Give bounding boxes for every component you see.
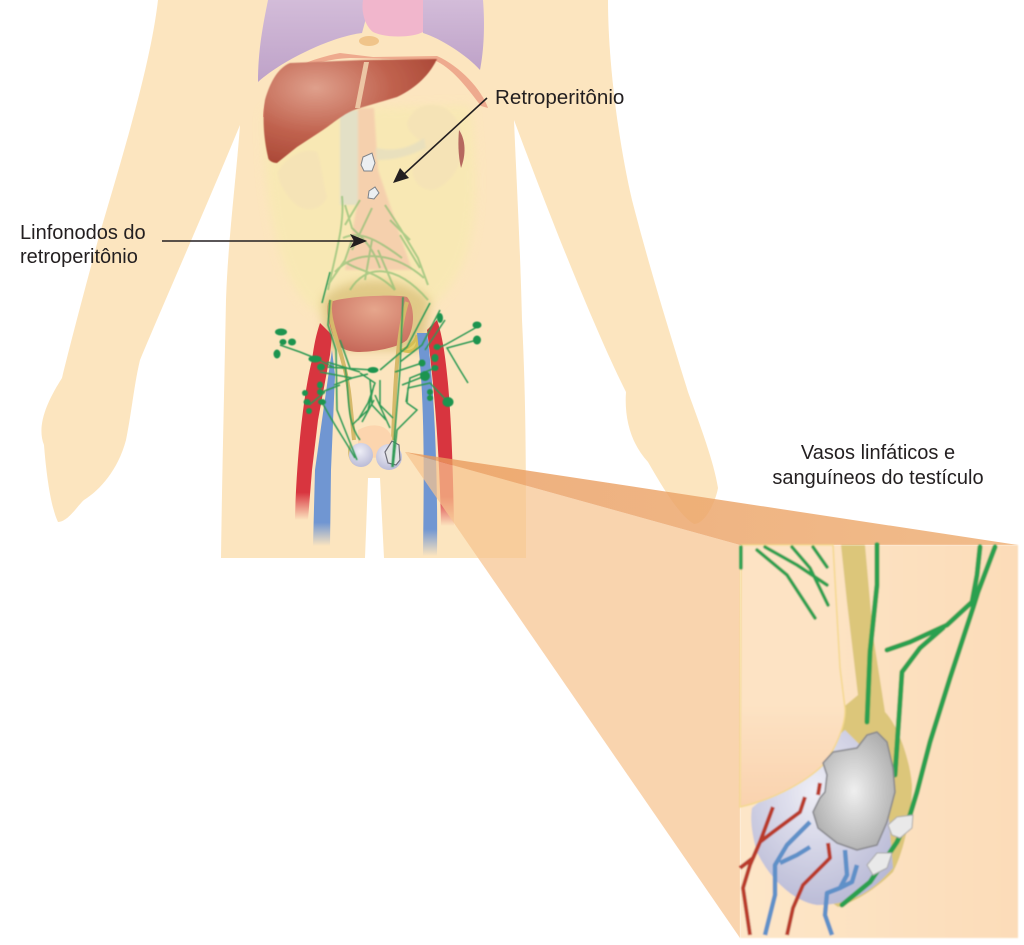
pelvic shadow <box>322 280 430 350</box>
femoral vein left <box>313 350 335 546</box>
bladder <box>327 296 413 352</box>
kidneys <box>278 105 463 209</box>
seminal vesicle <box>402 335 418 351</box>
testicle <box>751 730 893 905</box>
body silhouette <box>41 0 718 558</box>
lungs <box>258 0 484 82</box>
liver <box>264 59 437 163</box>
diaphragm <box>263 53 488 118</box>
lymphatic vessels and nodes <box>274 272 482 467</box>
blue veins <box>765 822 857 935</box>
label: retroperitônio: Retroperitônio <box>495 86 624 109</box>
iliac and femoral artery right <box>427 320 454 526</box>
small tumor upper <box>888 815 913 838</box>
lower abdominal lymph network <box>328 196 428 300</box>
arrow: linfonodos <box>162 234 367 248</box>
magnification cone upper <box>405 452 1018 545</box>
aorta and vena cava <box>340 108 426 270</box>
magnification cone lower <box>405 452 740 938</box>
arrow: retroperitônio <box>393 98 487 183</box>
green lymph vessels <box>741 545 995 905</box>
inset panel: testicle detail <box>740 545 1018 938</box>
label: linfonodos do retroperitônio: retroperitônio <box>20 246 138 268</box>
vas deferens <box>330 300 407 440</box>
penis shadow and scrotum <box>348 425 402 470</box>
iliac and femoral artery left <box>295 323 332 520</box>
tunica and cord <box>800 545 912 907</box>
inset background <box>740 545 1018 938</box>
large tumor <box>813 732 895 850</box>
esophagus stub <box>359 36 379 46</box>
retroperitoneal tumor nodes <box>361 153 379 199</box>
label: vasos linfáticos e sanguíneos do testículo: sanguíneos do testículo <box>772 467 984 489</box>
label: vasos linfáticos e sanguíneos do testículo: Vasos linfáticos e <box>801 442 955 464</box>
label: linfonodos do retroperitônio: Linfonodos do <box>20 222 146 244</box>
abdomen cavity <box>264 105 476 328</box>
red blood vessels <box>740 783 830 935</box>
spleen <box>458 130 465 168</box>
small tumor lower <box>867 853 892 875</box>
testis tumor <box>385 441 400 465</box>
falciform ligament <box>355 62 369 108</box>
heart <box>362 0 423 36</box>
penis base skin <box>740 545 845 807</box>
femoral vein right <box>417 333 437 556</box>
